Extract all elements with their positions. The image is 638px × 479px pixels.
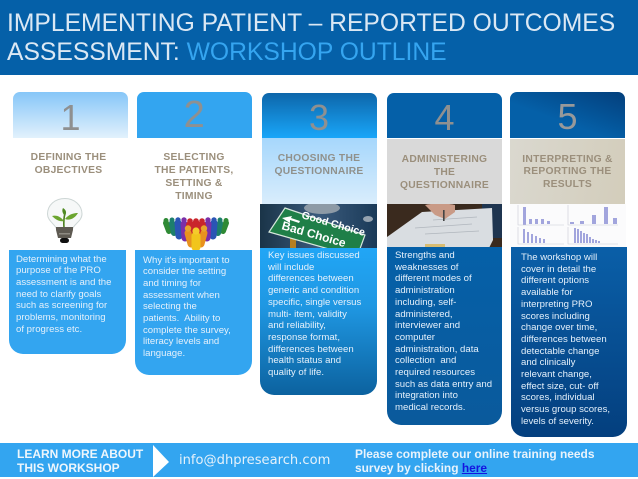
description box 4 <box>387 247 502 425</box>
icon: coloured group of people <box>163 217 229 250</box>
panel: step 3 <box>260 93 377 395</box>
panel: step 1 <box>9 92 128 354</box>
footer call to action: LEARN MORE ABOUT THIS WORKSHOP <box>17 447 143 475</box>
footer banner <box>0 443 638 477</box>
panel: step 5 <box>510 92 627 437</box>
panel: step 2 <box>135 92 252 375</box>
description box 1 <box>9 250 126 354</box>
image: good choice bad choice sign <box>260 204 377 249</box>
image: hand filling in a form <box>387 204 502 247</box>
number tab 3 <box>262 93 376 138</box>
icon: light bulb with plant <box>47 198 82 243</box>
heading 3: CHOOSING THE QUESTIONNAIRE <box>274 153 364 177</box>
heading 5: INTERPRETING & REPORTING THE RESULTS <box>522 154 613 190</box>
number tab 4 <box>387 93 502 138</box>
heading 2: SELECTING THE PATIENTS, SETTING & TIMING <box>155 152 233 202</box>
heading background 5 <box>510 139 625 204</box>
header banner <box>0 0 638 75</box>
survey note: Please complete our online training needs survey by clicking here <box>355 447 594 475</box>
description box 5 <box>511 247 627 437</box>
title: IMPLEMENTING PATIENT – REPORTED OUTCOMES ASSESSMENT: WORKSHOP OUTLINE <box>7 10 615 66</box>
description box 3 <box>260 248 376 395</box>
text 5: The workshop will cover in detail the different options available for interpreting PRO scores including change over time, differences between detectable change and clinically relevant change, effect size, cut- off scores, individual versus group scores, levels of severity. <box>521 252 610 427</box>
text 3: Key issues discussed will include differences between generic and condition specific, single versus multi- item, validity and reliability, response format, differences between health status and quality of life. <box>268 250 361 378</box>
panel: step 4 <box>387 93 502 425</box>
number tab 4: 4 <box>434 97 455 138</box>
number tab 5: 5 <box>557 96 578 137</box>
text 1: Determining what the purpose of the PRO assessment is and the need to clarify goals such as screening for problems, monitoring of progress etc. <box>16 254 111 335</box>
heading 1: DEFINING THE OBJECTIVES <box>31 152 106 176</box>
heading background 4 <box>387 139 502 204</box>
description box 2 <box>135 250 252 375</box>
image: good choice bad choice sign: Good Choice <box>300 209 366 239</box>
heading 4: ADMINISTERING THE QUESTIONNAIRE <box>400 154 489 191</box>
number tab 5 <box>510 92 625 138</box>
text 4: Strengths and weaknesses of different modes of administration including, self- administered, interviewer and computer administration, data collection and required resources such as data entry and integration into medical records. <box>395 250 492 413</box>
number tab 3: 3 <box>309 97 329 138</box>
image: result charts <box>518 205 618 244</box>
arrow <box>153 445 169 477</box>
number tab 2 <box>136 92 252 138</box>
heading background 3 <box>262 138 376 204</box>
number tab 1 <box>13 92 128 138</box>
number tab 2: 2 <box>184 94 205 136</box>
email: info@dhpresearch.com <box>179 453 330 468</box>
number tab 1: 1 <box>60 96 81 138</box>
text 2: Why it's important to consider the setting and timing for assessment when selecting the patients. Ability to complete the survey, literacy levels and language. <box>143 254 231 359</box>
